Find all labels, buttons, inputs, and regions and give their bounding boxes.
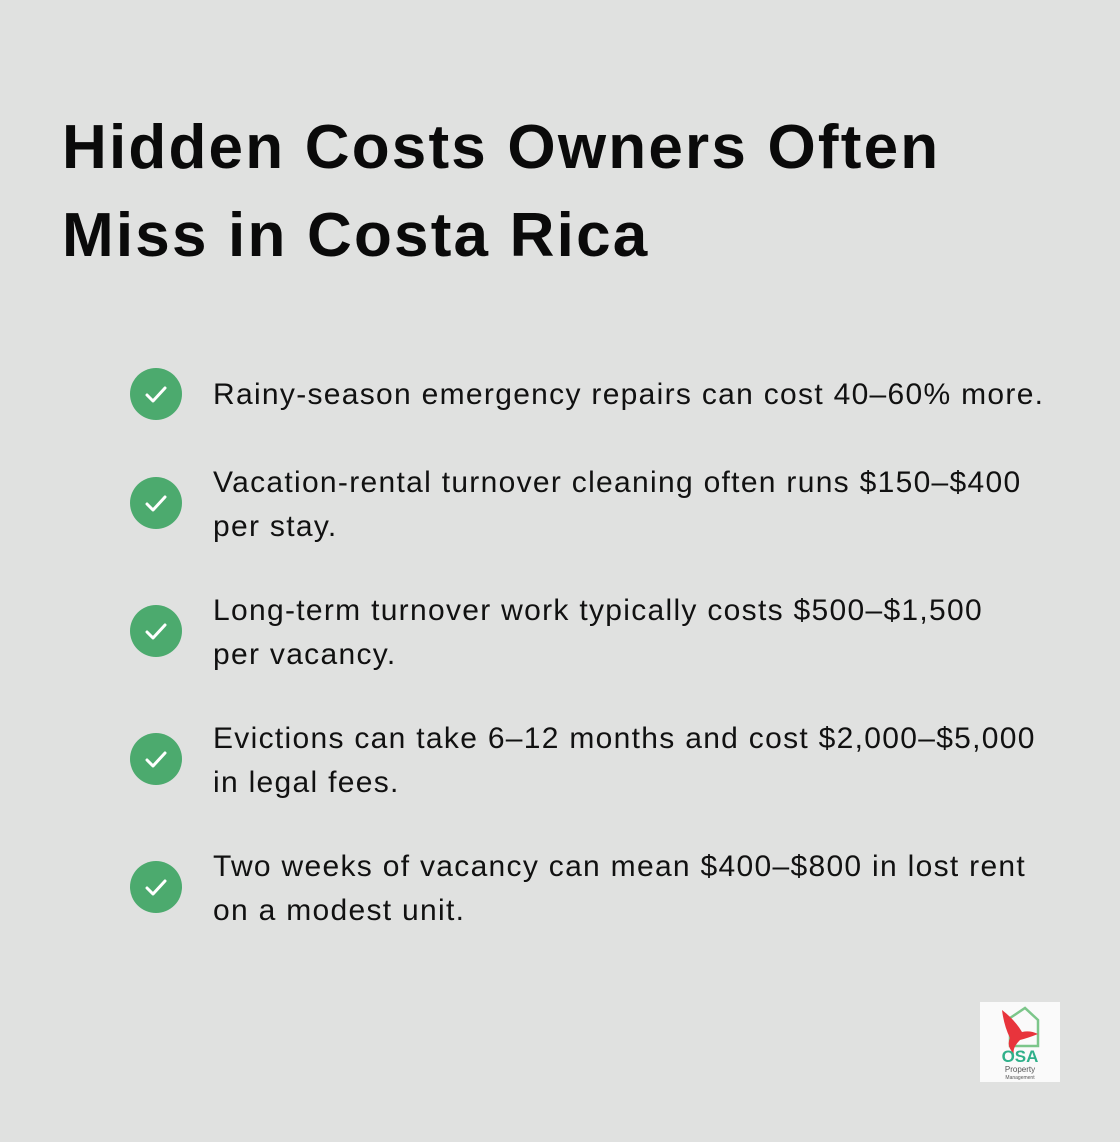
text: Rainy-season emergency repairs can cost 40–60% more. [213,378,1044,411]
text [213,722,1036,799]
item 4 [130,722,1036,799]
item 3 [130,594,983,671]
logo [980,1002,1060,1082]
icon: check [130,477,182,529]
text [213,594,983,671]
text: on a modest unit. [213,894,465,927]
text [213,850,1026,927]
logo: Property [1005,1065,1035,1074]
item 5 [130,850,1026,927]
text: Long-term turnover work typically costs $500–$1,500 [213,594,983,627]
item 2 [130,466,1021,543]
text: in legal fees. [213,766,400,799]
logo: Management [1005,1075,1035,1081]
text: per stay. [213,510,338,543]
title: Hidden Costs Owners Often [62,113,940,182]
title: Miss in Costa Rica [62,201,649,270]
text: Evictions can take 6–12 months and cost $2,000–$5,000 [213,722,1036,755]
title [62,113,940,270]
text: Two weeks of vacancy can mean $400–$800 in lost rent [213,850,1026,883]
text: Vacation-rental turnover cleaning often runs $150–$400 [213,466,1021,499]
text: per vacancy. [213,638,396,671]
icon: check [130,733,182,785]
text [213,466,1021,543]
item 1 [130,368,1044,420]
logo: OSA [1002,1047,1038,1066]
icon: check [130,605,182,657]
icon: check [130,861,182,913]
icon: check [130,368,182,420]
